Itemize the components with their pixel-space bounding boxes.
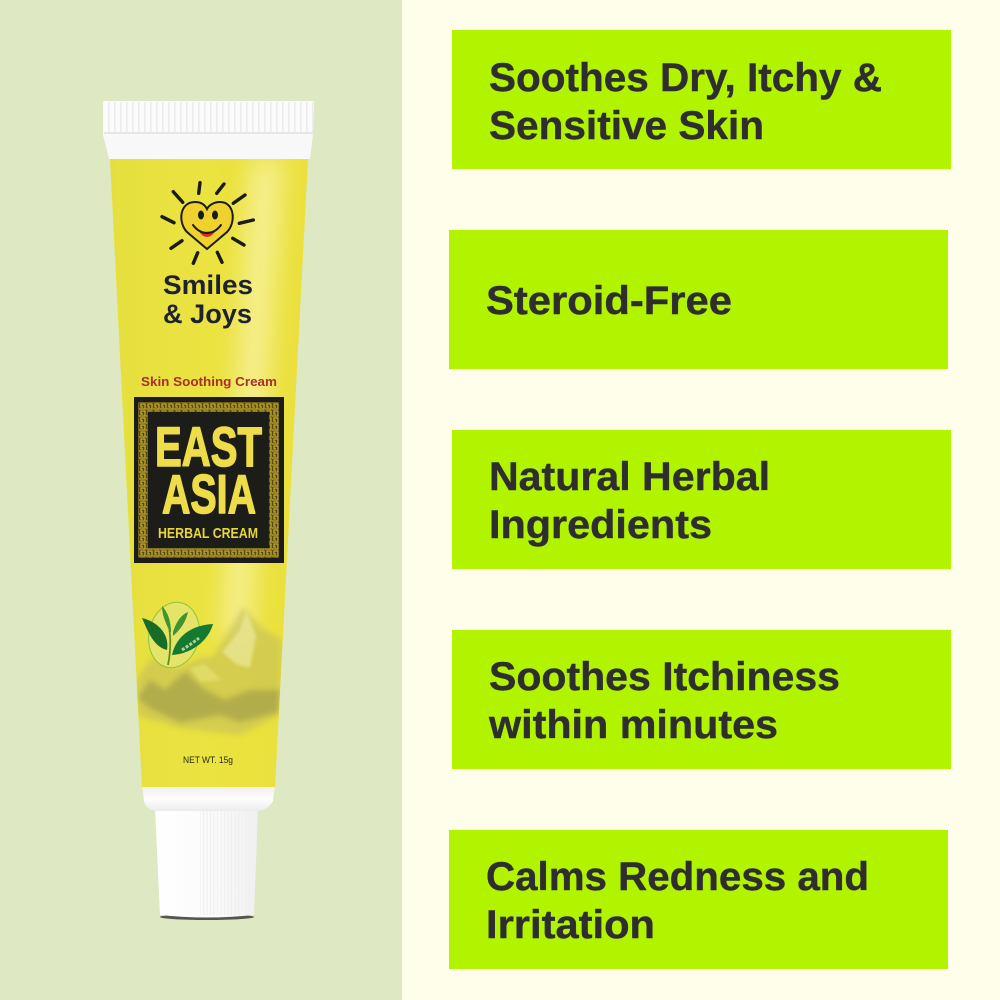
tube crimped top bbox=[103, 101, 314, 159]
benefit card: calms redness: Irritation bbox=[486, 903, 655, 947]
tube nozzle cap bbox=[155, 808, 258, 920]
product descriptor: Skin Soothing Cream bbox=[141, 375, 277, 389]
product tube bbox=[103, 101, 314, 920]
benefit card: soothes dry skin: Sensitive Skin bbox=[489, 104, 764, 148]
mountain illustration bbox=[137, 607, 282, 735]
benefit card: natural ingredients bbox=[452, 430, 951, 569]
benefit card: steroid-free: Steroid-Free bbox=[486, 279, 732, 323]
tube white collar bbox=[142, 785, 275, 811]
tube yellow body bbox=[110, 159, 308, 787]
black product label: HERBAL CREAM bbox=[158, 525, 258, 542]
black product label bbox=[134, 397, 284, 563]
benefit card: soothes dry skin bbox=[452, 30, 951, 169]
net weight: NET WT. 15g bbox=[183, 755, 233, 766]
benefit card: natural ingredients: Natural Herbal bbox=[489, 455, 770, 499]
logo: smiling sun bbox=[162, 183, 253, 263]
benefit card: soothes itchiness: Soothes Itchiness bbox=[489, 655, 840, 699]
benefit card: soothes dry skin: Soothes Dry, Itchy & bbox=[489, 56, 882, 100]
benefit card: steroid-free bbox=[449, 230, 948, 369]
benefit card: natural ingredients: Ingredients bbox=[489, 503, 712, 547]
icon: tea leaves bbox=[142, 598, 213, 672]
benefit card: calms redness bbox=[449, 830, 948, 969]
brand name: Smiles bbox=[163, 270, 253, 300]
black product label: ASIA bbox=[162, 463, 256, 525]
benefit card: calms redness: Calms Redness and bbox=[486, 855, 869, 899]
benefit card: soothes itchiness: within minutes bbox=[488, 703, 778, 747]
brand name bbox=[163, 270, 253, 329]
panel: left background bbox=[0, 0, 402, 1000]
black product label: EAST bbox=[155, 415, 262, 478]
brand name: & Joys bbox=[163, 299, 252, 329]
panel: right background bbox=[402, 0, 1000, 1000]
benefit card: soothes itchiness bbox=[452, 630, 951, 769]
